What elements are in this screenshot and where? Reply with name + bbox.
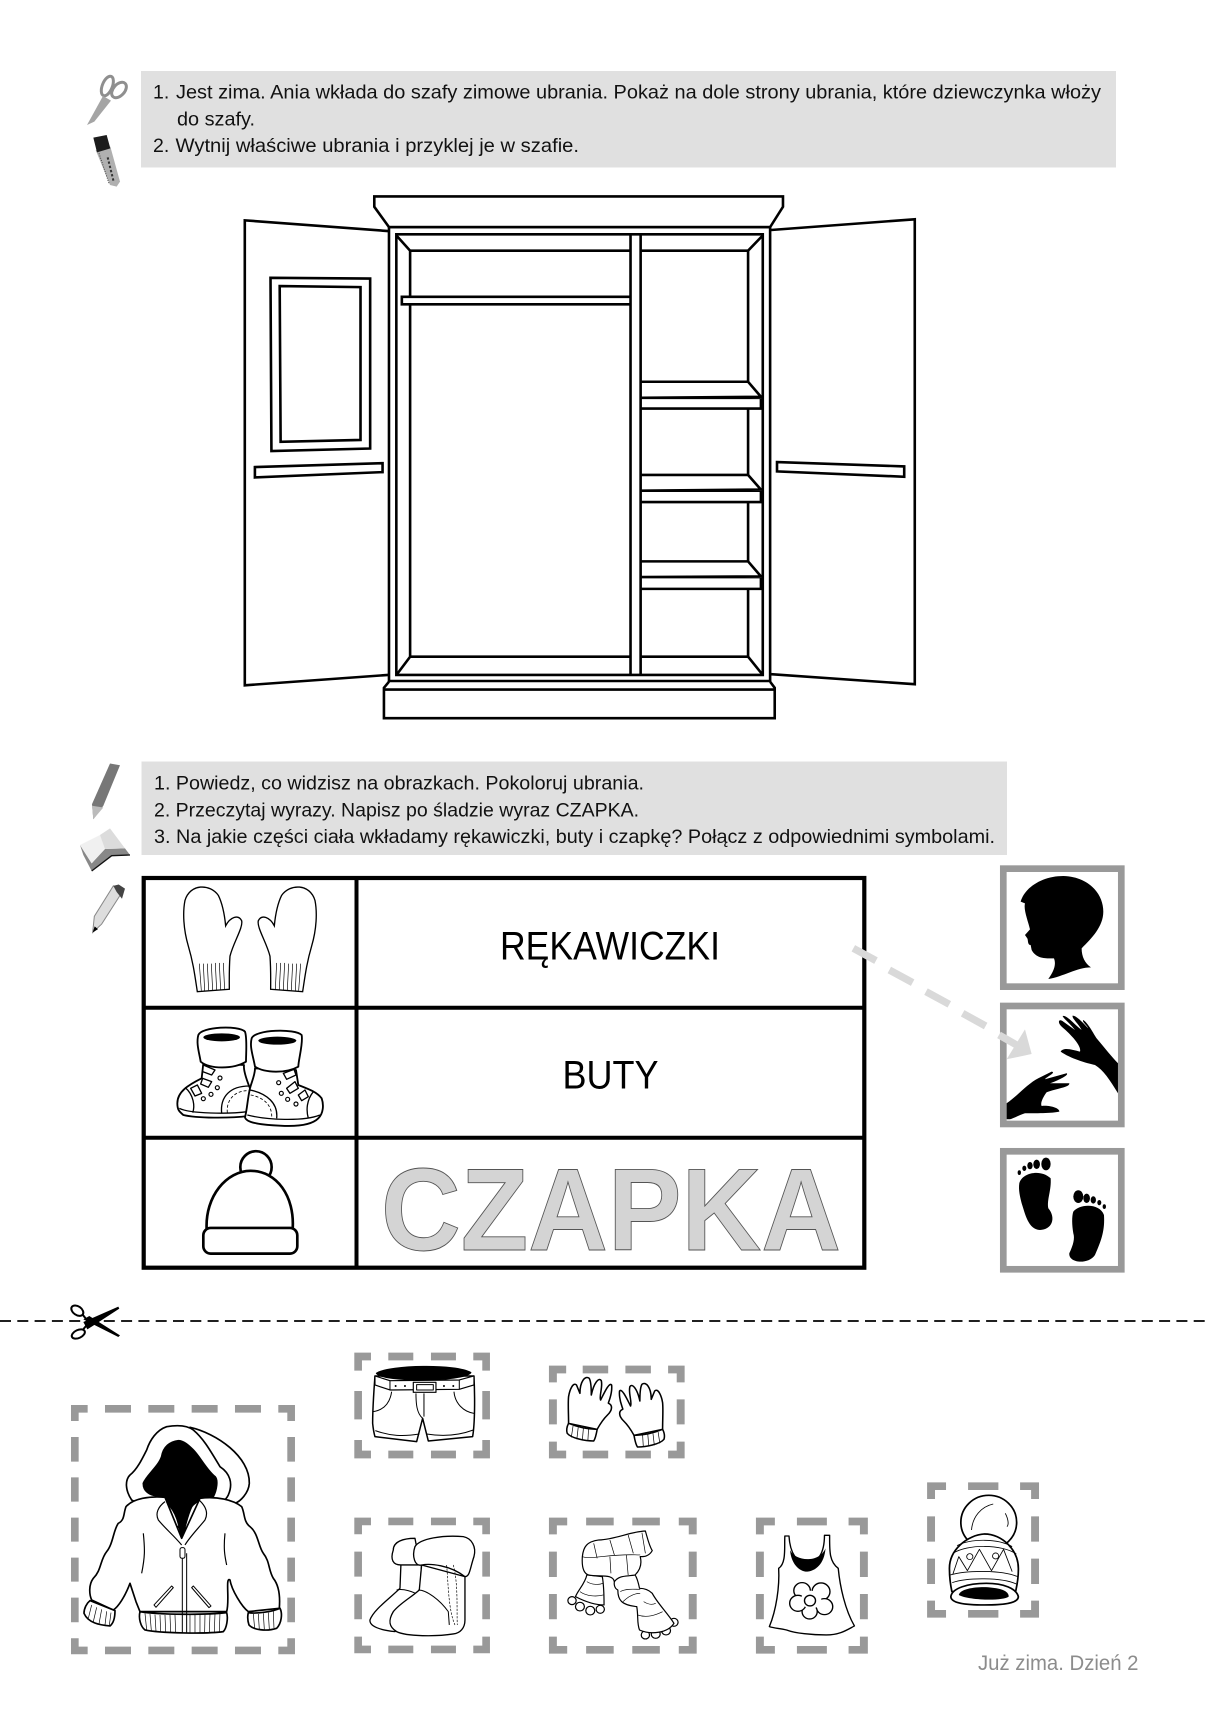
plinth: [384, 682, 775, 718]
boots drawing: [370, 1536, 475, 1636]
symbol box: feet: [1003, 1151, 1121, 1269]
footer: page label: Już zima. Dzień 2: [978, 1651, 1138, 1675]
icon: marker: [93, 135, 120, 187]
word: BUTY: BUTY: [562, 1054, 658, 1098]
instruction text 1: [153, 82, 1101, 130]
cut-out card: shorts: [354, 1353, 490, 1458]
cornice: [374, 196, 783, 227]
icon: mittens: [184, 887, 316, 992]
instruction text 1: Jest zima. Ania wkłada do szafy zimowe ubrania. Pokaż na dole strony ubrania, które dziewczynka włoży: [176, 82, 1101, 104]
tank top drawing: [769, 1535, 854, 1635]
jacket drawing: [84, 1426, 281, 1633]
icon: light pencil: [93, 885, 125, 933]
shorts drawing: [373, 1367, 475, 1442]
cut-out card: jacket: [71, 1405, 295, 1654]
bobble hat drawing: [949, 1495, 1018, 1605]
icon: winter boots: [177, 1028, 323, 1126]
icon: cutting scissors: [69, 1303, 120, 1341]
left door: [245, 220, 388, 685]
icon: dark pencil: [92, 764, 120, 819]
right door: [771, 219, 915, 684]
symbol box: head: [1003, 869, 1121, 987]
scarf drawing: [568, 1531, 678, 1639]
shelves: [642, 382, 761, 589]
wardrobe body: [389, 227, 770, 681]
instruction text: connect symbols: 3. Na jakie części ciała wkładamy rękawiczki, buty i czapkę? Połącz z odpowiednimi symbolami.: [154, 826, 995, 848]
word table: [144, 878, 864, 1275]
dashed arrow: example connection: [853, 948, 1032, 1059]
cut-out card: gloves: [549, 1366, 685, 1458]
cut line: [0, 1320, 1211, 1322]
instruction text 1: 1.: [153, 82, 169, 104]
gloves drawing: [567, 1377, 664, 1447]
instruction box 1: [141, 71, 1116, 168]
instruction text 2: 2.: [153, 135, 169, 157]
icon: open book: [80, 828, 130, 871]
symbol box: hands: [1003, 1006, 1121, 1124]
instruction text: say what you see: 1. Powiedz, co widzisz na obrazkach. Pokoloruj ubrania.: [154, 772, 644, 794]
cut-out card: scarf: [549, 1518, 697, 1654]
instruction text 2: Wytnij właściwe ubrania i przyklej je w szafie.: [176, 135, 579, 157]
hanging rail: [402, 297, 630, 304]
instruction box 2: [142, 762, 1007, 855]
icon: scissors (grey): [87, 75, 129, 125]
cut-out card: fur boots: [354, 1518, 490, 1653]
icon: simple hat: [203, 1151, 297, 1254]
cut-out card: tank top: [756, 1518, 868, 1654]
word: CZAPKA tracing: CZAPKA: [381, 1144, 841, 1275]
cut-out card: patterned bobble hat: [927, 1482, 1039, 1618]
wardrobe illustration: [245, 196, 915, 718]
instruction text: read words: 2. Przeczytaj wyrazy. Napisz po śladzie wyraz CZAPKA.: [154, 800, 639, 822]
instruction text 1: do szafy.: [177, 108, 255, 130]
word: RĘKAWICZKI: RĘKAWICZKI: [500, 924, 720, 968]
